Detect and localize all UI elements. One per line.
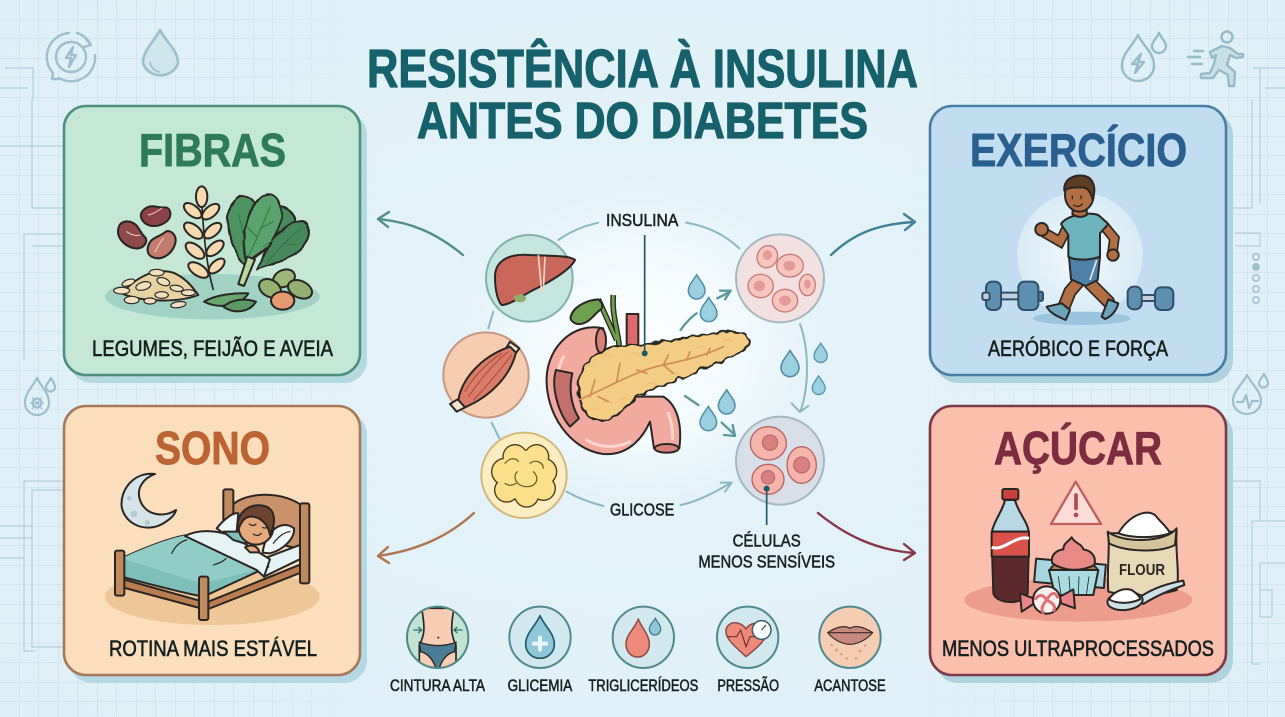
labels: symptoms: PRESSÃO: [717, 675, 779, 695]
dashed flow arrows: [681, 291, 735, 436]
organ: liver: [486, 235, 575, 322]
symptoms row: [390, 607, 886, 695]
illustration: sugary foods: [964, 482, 1192, 622]
panel: sono: [64, 406, 367, 683]
connector lines: [488, 223, 808, 506]
caption: exercicio: AERÓBICO E FORÇA: [988, 336, 1168, 361]
icon: cintura alta: [407, 607, 468, 672]
icon: pressao: [717, 607, 778, 668]
title: ANTES DO DIABETES: [417, 92, 868, 149]
icon: energy cycle: [47, 33, 95, 81]
icon: left margin drop: [25, 378, 55, 415]
text: flour label: FLOUR: [1119, 562, 1165, 579]
label: celulas menos sensiveis: [698, 486, 835, 572]
cells: top group: [736, 234, 824, 322]
organ: pancreas and duodenum: [547, 295, 749, 454]
title: [367, 38, 918, 149]
cells: bottom group: [736, 417, 824, 505]
panel: exercicio: [930, 106, 1233, 383]
icon: runner: [1188, 32, 1243, 86]
icon: triglicerideos: [613, 607, 674, 668]
icon: water drop top left: [143, 30, 178, 75]
heading: acucar: AÇÚCAR: [994, 422, 1162, 474]
label: glicose: GLICOSE: [610, 499, 674, 519]
labels: symptoms: CINTURA ALTA: [390, 676, 486, 695]
labels: symptoms: ACANTOSE: [814, 676, 886, 695]
panel: acucar: [930, 406, 1233, 683]
glucose drops: [688, 275, 827, 431]
heading: sono: SONO: [155, 422, 270, 474]
label: celulas menos sensiveis: MENOS SENSÍVEIS: [698, 552, 835, 572]
caption: sono: ROTINA MAIS ESTÁVEL: [109, 636, 317, 661]
organ: fat tissue: [481, 433, 567, 518]
title: RESISTÊNCIA À INSULINA: [367, 38, 918, 99]
caption: acucar: MENOS ULTRAPROCESSADOS: [942, 636, 1214, 661]
arrow: to fibras: [378, 212, 463, 255]
heading: exercicio: EXERCÍCIO: [970, 124, 1187, 176]
caption: fibras: LEGUMES, FEIJÃO E AVEIA: [92, 336, 333, 361]
illustration: person walking with dumbbells: [982, 176, 1173, 325]
labels: symptoms: GLICEMIA: [508, 676, 573, 695]
organ: muscle: [443, 332, 529, 418]
label: celulas menos sensiveis: CÉLULAS: [733, 531, 801, 551]
central diagram: [443, 210, 835, 572]
panel: fibras: [64, 106, 367, 383]
icon: glicemia: [509, 607, 571, 668]
arrow: to acucar: [818, 513, 915, 560]
icon: right margin drop: [1233, 374, 1268, 414]
icon: drops with bolt top right: [1122, 33, 1166, 81]
arrow: to sono: [378, 513, 474, 563]
illustration: fibre foods: [105, 186, 320, 319]
illustration: moon and bed: [105, 474, 320, 625]
label: insulina: [606, 210, 678, 356]
heading: fibras: FIBRAS: [139, 124, 286, 176]
label: insulina: INSULINA: [606, 210, 678, 230]
arrow: to exercicio: [831, 214, 915, 255]
icon: acantose: [819, 607, 881, 668]
labels: symptoms: [390, 675, 886, 695]
labels: symptoms: TRIGLICERÍDEOS: [588, 676, 698, 695]
